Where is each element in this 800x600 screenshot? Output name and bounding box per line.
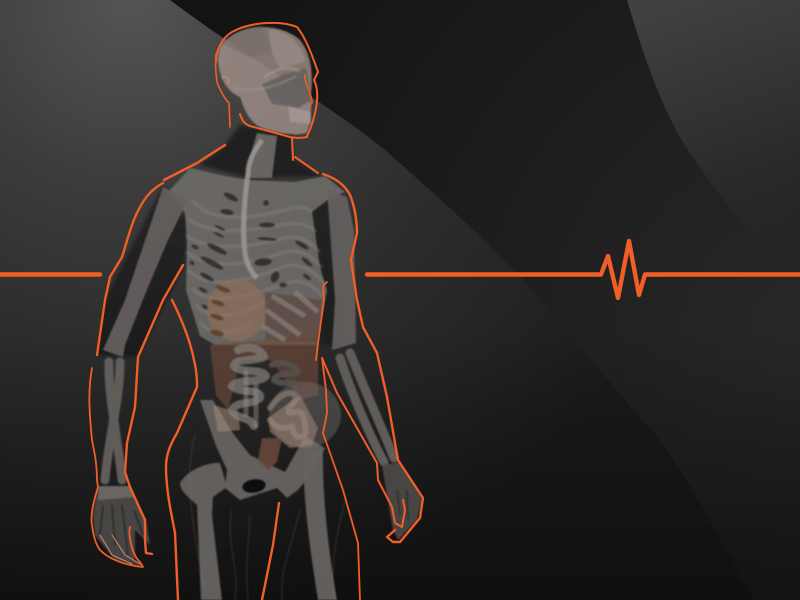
torso right outline (316, 282, 360, 600)
nerves and vessels (190, 435, 345, 600)
neck vertebrae (246, 133, 277, 178)
body shadow (97, 125, 342, 357)
pelvis (200, 400, 325, 500)
upper arm bones (103, 187, 356, 357)
right forearm bones (340, 353, 394, 462)
skeleton (93, 26, 422, 600)
head outline (216, 23, 318, 136)
left hand bones (93, 486, 150, 566)
organ: rectum (258, 438, 282, 470)
organ: stomach and rib shadows (209, 284, 322, 342)
right femur (303, 450, 337, 600)
organ: hip bone overlay (269, 382, 341, 448)
left shoulder and arm outline (164, 145, 225, 180)
rib cage (170, 168, 345, 345)
intestines (232, 348, 306, 437)
human figure (89, 23, 423, 600)
left forearm bones (105, 362, 122, 480)
right shoulder and arm outline (292, 138, 318, 173)
organ: liver (207, 279, 267, 341)
inner thigh outline (262, 503, 279, 600)
left femur (180, 463, 227, 600)
organ: lower colon (213, 395, 318, 448)
skull (218, 26, 312, 134)
torso left outline (166, 300, 197, 600)
organs (207, 279, 341, 470)
heartbeat line (0, 241, 800, 298)
organ: colon (210, 338, 318, 410)
body outline (89, 23, 423, 600)
esophagus (244, 140, 262, 278)
right hand bones (382, 462, 422, 540)
